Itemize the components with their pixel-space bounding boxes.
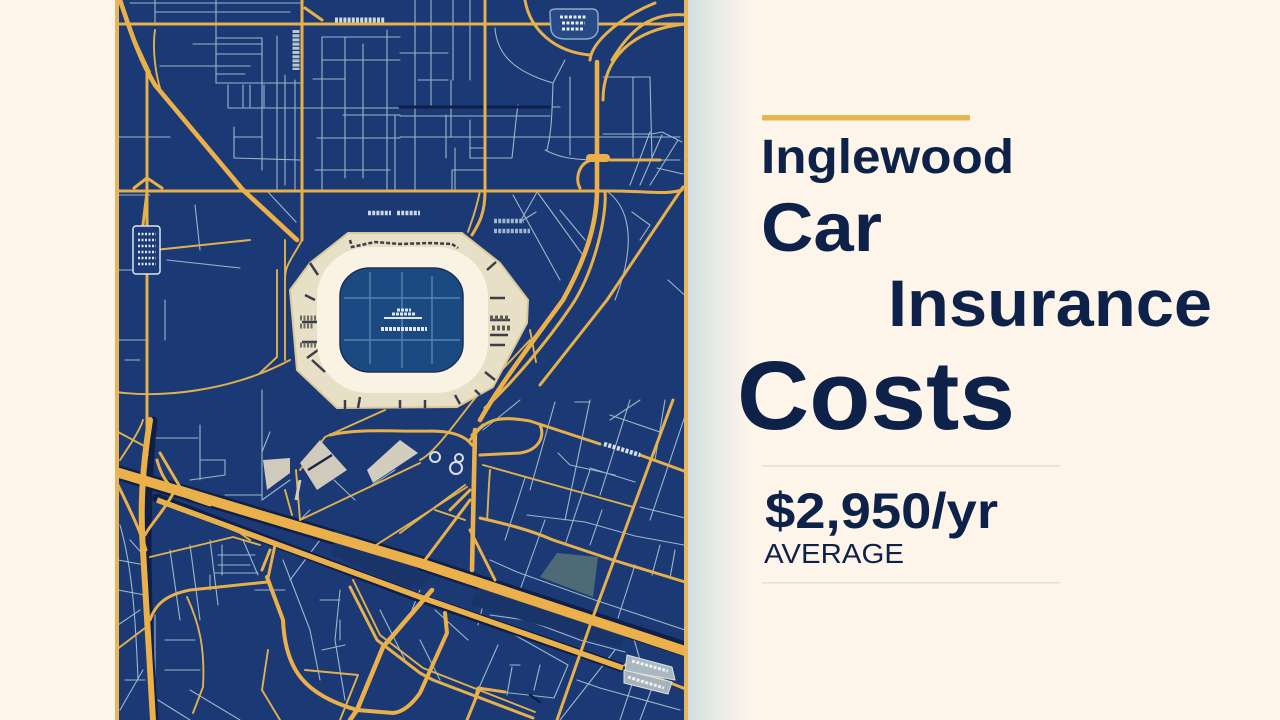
field lines [344,272,460,368]
map shadow [688,0,750,720]
title: Car: Car [761,189,882,266]
accent bar [762,115,970,120]
stadium outer concourse [290,233,528,408]
secondary gold streets [285,320,688,720]
main gold arterials [116,0,686,460]
street grid west and south [117,195,440,720]
icon: road label east [604,444,640,455]
title: Insurance: Insurance [888,266,1212,340]
street grid east [435,400,687,720]
icon: small roundabouts [430,452,463,474]
icon: city seal marker west [133,226,160,274]
dark road shadows [116,420,688,720]
map water-blue base [116,0,688,720]
price label: AVERAGE [764,538,904,569]
title: Costs: Costs [737,341,1015,450]
panel: street map of Inglewood [116,0,690,720]
icon: highway shield north [550,9,598,39]
park patch [540,553,598,597]
map label marks [296,20,530,231]
stadium field [340,268,463,372]
divider top [762,465,1060,467]
map gold frame [117,0,686,720]
panel: stadium [290,233,528,410]
title: Inglewood: Inglewood [761,131,1014,184]
divider bottom [762,582,1060,584]
stadium seating marks [300,240,510,410]
stadium white ring [317,247,488,393]
freeway and interchange [116,420,688,720]
field logo marks [381,310,427,329]
icon: transit station southeast [624,655,675,694]
price value: $2,950/yr [765,483,998,539]
parking lots south of stadium [263,440,418,500]
street grid north [117,0,690,300]
